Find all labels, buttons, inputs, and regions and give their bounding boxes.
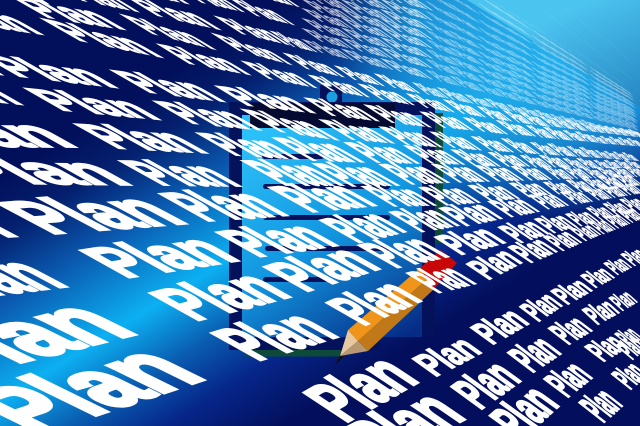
text row D2: Plan bbox=[143, 181, 305, 230]
text row J: Plan bbox=[275, 48, 352, 82]
text rows: upper far field: Plan Plan Plan bbox=[474, 16, 538, 55]
clipboard green edge bbox=[245, 113, 443, 356]
text row M: Plan bbox=[576, 263, 620, 292]
text row D2: Plan bbox=[504, 177, 559, 202]
text rows: upper far field: Plan Plan Plan bbox=[474, 24, 538, 61]
text row D: Plan bbox=[424, 159, 499, 188]
text row E: Plan bbox=[182, 126, 312, 166]
text rows: upper far field: Plan Plan Plan Plan Plan Plan bbox=[588, 78, 638, 108]
text row G: Plan Plan bbox=[522, 123, 578, 144]
text rows: upper far field: Plan Plan Plan bbox=[474, 72, 541, 102]
text row C: Plan bbox=[556, 186, 598, 208]
text rows: upper far field: Plan Plan Plan Plan Plan bbox=[528, 76, 596, 107]
text row H: Plan bbox=[300, 70, 377, 102]
text row B: Plan bbox=[529, 209, 584, 238]
text row A: Plan bbox=[194, 301, 355, 370]
text rows: upper far field: Plan Plan Plan Plan Plan Plan bbox=[588, 95, 640, 120]
text row F: Plan Plan bbox=[564, 144, 607, 161]
text row F: Plan bbox=[423, 128, 490, 155]
text rows: upper far field: Plan Plan Plan bbox=[474, 0, 536, 40]
text row D: Plan bbox=[226, 153, 359, 193]
text row J: Plan bbox=[369, 70, 427, 97]
clipboard black bar bbox=[250, 103, 395, 128]
text row J: Plan bbox=[328, 61, 391, 90]
text rows: top middle: Plan Plan Plan bbox=[295, 4, 440, 53]
text row H: Plan bbox=[473, 103, 517, 125]
text row J: Plan Plan bbox=[408, 80, 479, 107]
text row B: Plan bbox=[491, 214, 558, 248]
text rows: upper far field: Plan Plan Plan Plan Plan Plan bbox=[588, 99, 640, 124]
text row J: Plan Plan Plan bbox=[503, 102, 558, 122]
text row G: Plan bbox=[97, 64, 239, 109]
text row G: Plan Plan bbox=[560, 128, 603, 146]
text row H: Plan bbox=[231, 55, 326, 93]
text rows: upper far field: Plan Plan Plan bbox=[474, 56, 540, 88]
text row E: Plan bbox=[483, 149, 537, 171]
text row F: Plan bbox=[466, 133, 521, 156]
text row D: Plan Plan bbox=[540, 164, 598, 183]
text row J: Plan Plan Plan Plan bbox=[548, 112, 600, 130]
text row D2: Plan bbox=[539, 177, 581, 198]
text row A: Plan bbox=[458, 242, 531, 285]
text row M: Plan bbox=[513, 286, 569, 327]
text row F: Plan bbox=[495, 135, 547, 159]
text rows: upper far field: Plan Plan bbox=[421, 56, 490, 87]
background: pale top right corner bbox=[467, 0, 640, 107]
text row C: Plan bbox=[481, 192, 548, 222]
clipboard sheet bbox=[242, 115, 422, 337]
text row C: Plan bbox=[378, 199, 470, 238]
text row G: Plan bbox=[458, 114, 515, 139]
clipboard writing lines bbox=[262, 154, 390, 282]
text row C bbox=[0, 178, 640, 310]
text rows: top left: Plan bbox=[204, 10, 298, 50]
text row A: Plan bbox=[567, 220, 606, 245]
text rows: upper far field: Plan Plan bbox=[421, 27, 489, 62]
text row J: Plan Plan bbox=[461, 92, 517, 114]
text row D: Plan bbox=[300, 157, 413, 193]
text rows: upper far field: Plan Plan Plan Plan Plan bbox=[528, 82, 597, 111]
text row H: Plan bbox=[146, 38, 262, 81]
text row C: Plan bbox=[523, 188, 576, 214]
text rows: upper far field: Plan Plan Plan bbox=[474, 64, 541, 94]
text row N: Plan bbox=[578, 294, 626, 330]
text rows: upper far field: Plan Plan Plan Plan Plan Plan bbox=[588, 91, 640, 117]
text row H: Plan bbox=[27, 11, 177, 65]
text row A: Plan bbox=[501, 232, 566, 268]
text row B: Plan bbox=[249, 237, 396, 300]
text row G bbox=[0, 41, 640, 149]
text row G: Plan bbox=[295, 93, 388, 126]
text row H: Plan bbox=[438, 96, 493, 122]
text row H: Plan bbox=[351, 80, 423, 110]
clipboard bbox=[229, 85, 443, 356]
text row A: Plan bbox=[312, 271, 435, 333]
clipboard navy frame bbox=[229, 102, 435, 350]
text row B: Plan bbox=[561, 206, 604, 230]
text row F: Plan bbox=[228, 102, 352, 147]
text row F: Plan Plan bbox=[526, 140, 582, 160]
text row D2: Plan bbox=[252, 173, 392, 220]
text row N: Plan bbox=[542, 310, 600, 351]
text rows: upper far field: Plan Plan Plan Plan Plan Plan bbox=[588, 73, 638, 104]
text rows: upper far field: Plan Plan Plan bbox=[474, 33, 539, 69]
text rows: top middle bbox=[295, 0, 440, 84]
text row H: Plan bbox=[399, 89, 461, 117]
text rows: upper far field: Plan Plan Plan Plan Plan Plan bbox=[588, 65, 637, 98]
text row E: Plan bbox=[333, 137, 430, 169]
text rows: top middle: Plan Plan Plan bbox=[295, 24, 440, 73]
text rows: top middle: Plan Plan Plan bbox=[295, 35, 440, 84]
text row G: Plan bbox=[203, 80, 327, 119]
text rows: upper far field: Plan Plan Plan Plan Plan bbox=[528, 58, 594, 94]
text rows: upper far field: Plan Plan Plan bbox=[474, 81, 542, 109]
text row G: Plan bbox=[355, 100, 441, 133]
text row B: Plan bbox=[131, 261, 308, 329]
pencil wood tip bbox=[340, 330, 368, 356]
text row C: Plan bbox=[61, 224, 257, 286]
text row D2 bbox=[0, 170, 640, 254]
text rows: upper far field: Plan Plan Plan Plan Plan bbox=[528, 45, 593, 84]
pencil lead bbox=[335, 355, 344, 365]
text row D2: Plan bbox=[350, 180, 447, 212]
text rows: upper far field: Plan Plan bbox=[421, 67, 491, 96]
text row M: Plan bbox=[600, 253, 637, 279]
text row A: Plan bbox=[538, 225, 589, 256]
text row E: Plan bbox=[444, 146, 509, 171]
text rows: upper far field: Plan Plan Plan Plan Plan Plan bbox=[588, 103, 640, 126]
text row B: Plan bbox=[345, 227, 462, 275]
text row J bbox=[0, 0, 640, 138]
text rows: upper far field bbox=[421, 0, 640, 133]
text row F: Plan bbox=[308, 114, 405, 149]
text rows: top left: Plan bbox=[263, 27, 325, 57]
text row E: Plan bbox=[58, 117, 223, 161]
text rows: upper far field: Plan Plan bbox=[421, 46, 490, 78]
text rows: upper far field: Plan Plan bbox=[421, 36, 489, 70]
text row D: Plan bbox=[506, 162, 559, 185]
text row E: Plan Plan bbox=[517, 153, 576, 171]
text row E: Plan Plan bbox=[559, 155, 605, 171]
text: faint grid in top right corner: Plan Plan Plan Plan Plan bbox=[535, 4, 586, 44]
text row E bbox=[0, 111, 640, 171]
text rows: upper far field: Plan Plan Plan Plan Plan Plan bbox=[588, 82, 639, 111]
text row C: Plan bbox=[431, 196, 512, 232]
text rows: upper far field: Plan Plan Plan Plan Plan bbox=[528, 89, 597, 117]
text row H: Plan Plan Plan bbox=[537, 114, 592, 134]
text row C: Plan bbox=[308, 203, 420, 250]
text: faint grid in top right corner: Plan Plan Plan Plan Plan bbox=[522, 18, 576, 55]
pencil body bbox=[348, 268, 433, 351]
text rows: top left bbox=[0, 0, 325, 57]
text row M: Plan bbox=[404, 330, 491, 383]
pencil eraser bbox=[420, 250, 457, 290]
text row C: Plan bbox=[201, 214, 354, 265]
clipboard clip bbox=[320, 85, 342, 105]
text row B bbox=[0, 194, 640, 389]
text row D: Plan bbox=[468, 161, 532, 186]
text: faint grid in top right corner: Plan Plan Plan Plan Plan Plan Plan Plan bbox=[581, 39, 634, 81]
text row N bbox=[329, 286, 640, 426]
text row F: Plan bbox=[139, 94, 275, 137]
text row D: Plan bbox=[104, 154, 257, 194]
text rows: upper far field: Plan Plan Plan Plan Plan bbox=[528, 96, 598, 122]
text row E: Plan bbox=[260, 131, 377, 169]
text rows: upper far field: Plan Plan Plan Plan Plan bbox=[528, 70, 596, 102]
text row J: Plan bbox=[203, 28, 302, 71]
text rows: bottom right: Plan bbox=[535, 353, 600, 404]
text rows: upper far field: Plan Plan Plan Plan Plan bbox=[528, 51, 594, 89]
text row N: Plan bbox=[440, 351, 531, 417]
text row F bbox=[0, 66, 640, 163]
text row D bbox=[0, 148, 640, 194]
text row A bbox=[0, 203, 640, 426]
text rows: upper far field: Plan Plan Plan bbox=[474, 41, 539, 75]
text row D: Plan bbox=[368, 156, 460, 190]
background highlight: upper right bbox=[300, 0, 640, 220]
text: faint grid in top right corner bbox=[483, 0, 634, 88]
text row J: Plan bbox=[110, 8, 227, 56]
text row F: Plan bbox=[371, 122, 452, 153]
text row H: Plan Plan bbox=[499, 108, 555, 131]
text row G: Plan bbox=[413, 108, 482, 135]
text rows: bottom right: Plan bbox=[578, 328, 634, 367]
text rows: upper far field: Plan Plan Plan Plan Plan Plan bbox=[588, 69, 637, 101]
text rows: top middle: Plan Plan Plan bbox=[295, 14, 440, 63]
text rows: upper far field: Plan Plan Plan bbox=[474, 48, 540, 82]
text row A: Plan bbox=[395, 257, 487, 299]
text row M: Plan bbox=[462, 302, 537, 350]
text rows: upper far field: Plan Plan Plan Plan Plan Plan bbox=[588, 87, 640, 115]
text row G: Plan bbox=[490, 117, 543, 141]
text rows: upper far field: Plan Plan Plan Plan Plan bbox=[528, 38, 592, 78]
text row B: Plan bbox=[425, 220, 515, 260]
pencil bbox=[335, 250, 457, 365]
text rows: bottom right bbox=[479, 322, 640, 426]
text rows: upper far field: Plan Plan Plan Plan Plan bbox=[528, 26, 591, 69]
text rows: upper far field: Plan Plan Plan Plan Plan bbox=[528, 32, 591, 74]
text row N: Plan bbox=[499, 328, 570, 379]
text: faint grid in top right corner: Plan Plan Plan Plan Plan Plan bbox=[594, 29, 634, 65]
text row F: Plan bbox=[10, 81, 176, 127]
text rows: upper far field: Plan Plan Plan Plan Plan bbox=[528, 64, 595, 98]
text row H bbox=[0, 0, 640, 140]
text row D2: Plan bbox=[461, 179, 528, 206]
text row E: Plan bbox=[396, 141, 474, 170]
text row M bbox=[288, 244, 640, 426]
text rows: upper far field: Plan Plan bbox=[421, 18, 488, 54]
text row D2: Plan bbox=[410, 180, 490, 211]
text rows: upper far field: Plan Plan Plan bbox=[474, 8, 537, 47]
text: faint grid in top right corner: Plan Plan Plan Plan Plan Plan Plan Plan bbox=[573, 49, 628, 88]
text row M: Plan bbox=[545, 274, 599, 310]
text rows: upper far field: Plan Plan bbox=[421, 8, 488, 46]
